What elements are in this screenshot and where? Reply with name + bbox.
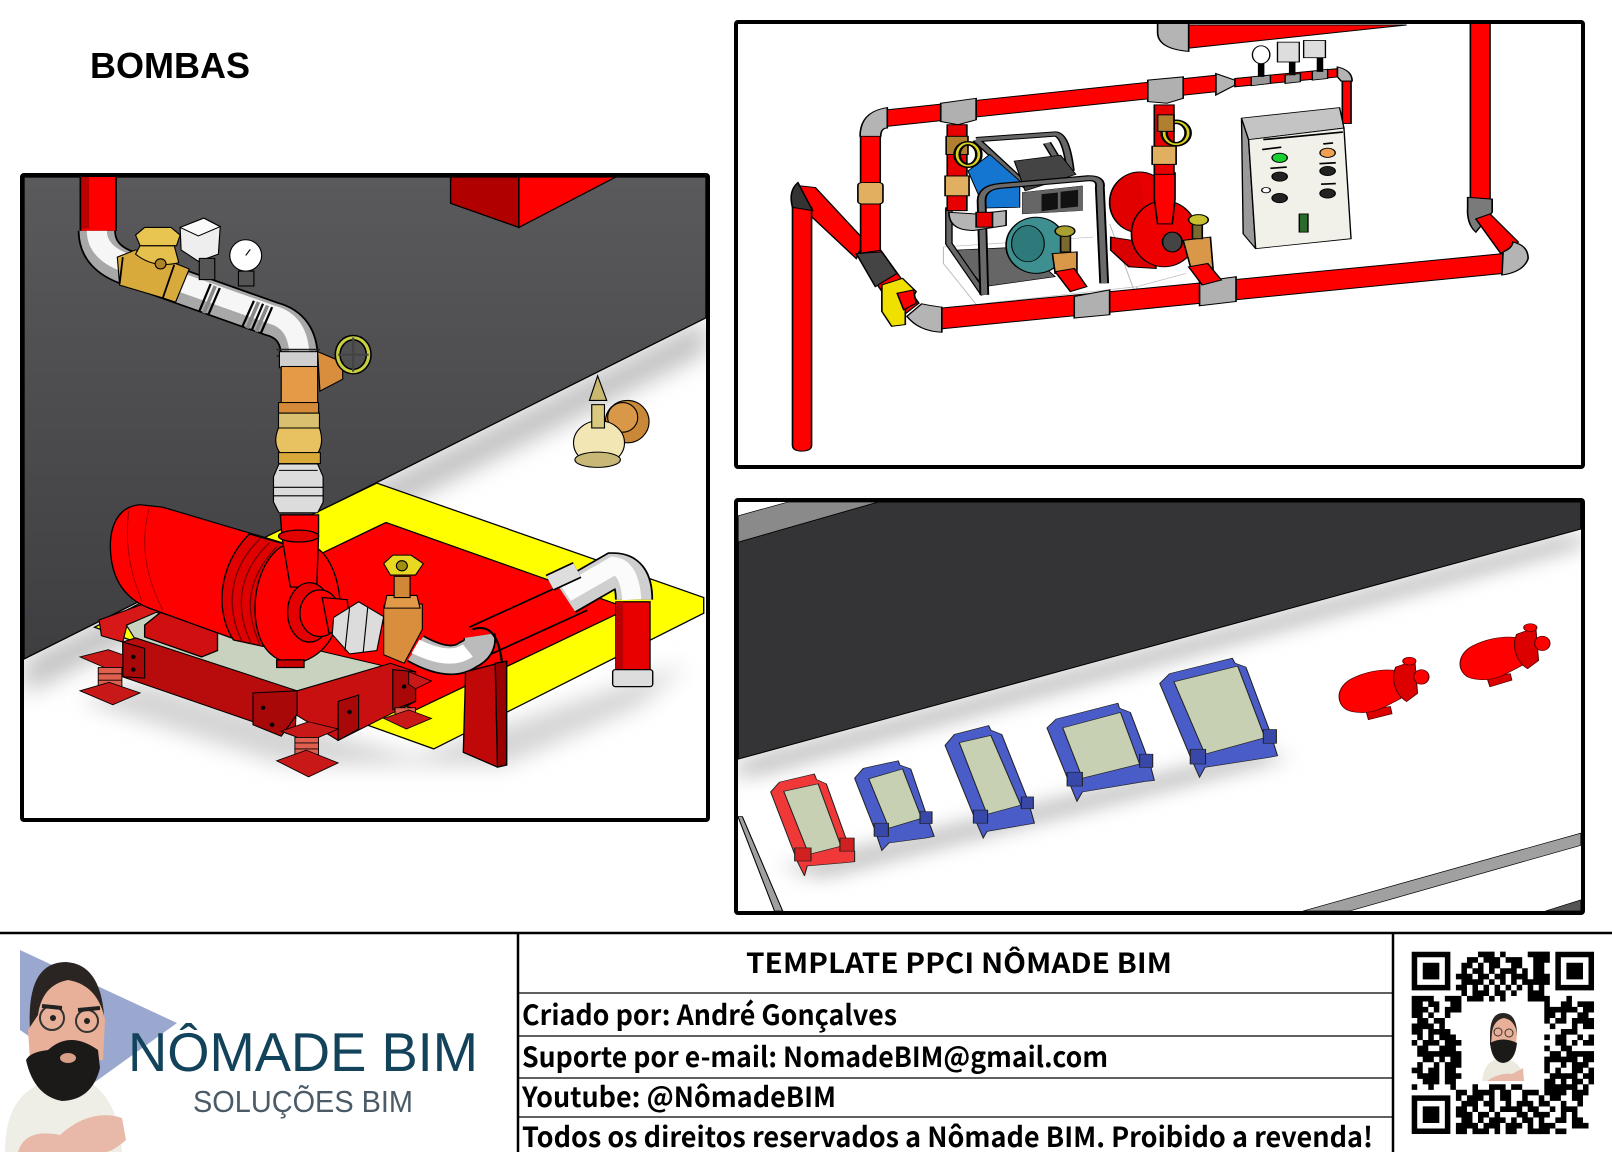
template info text: Criado por: André Gonçalves xyxy=(522,994,897,1034)
panel: pump models row xyxy=(734,498,1585,915)
title: BOMBAS xyxy=(90,45,250,86)
ghost bases xyxy=(943,224,1186,318)
template info text: TEMPLATE PPCI NÔMADE BIM xyxy=(746,942,1172,982)
template info text: Suporte por e-mail: NomadeBIM@gmail.com xyxy=(522,1036,1108,1076)
template info text: Youtube: @NômadeBIM xyxy=(521,1076,836,1116)
discharge valve xyxy=(332,555,423,663)
logo triangle xyxy=(20,950,177,1082)
upper pipes xyxy=(85,177,320,358)
pump base: blue 3 xyxy=(1047,703,1154,801)
pipe support and riser xyxy=(463,602,653,767)
avatar xyxy=(5,962,126,1152)
pump base: blue 4 xyxy=(1160,658,1277,777)
left drop pipe xyxy=(791,183,864,451)
pump base: blue 1 xyxy=(855,761,934,851)
spring mounts xyxy=(80,650,431,777)
red pump 2 xyxy=(1460,624,1550,687)
control panel xyxy=(1242,108,1351,249)
pump base: red xyxy=(771,774,855,876)
QR avatar xyxy=(1482,1013,1524,1081)
engine pump frame xyxy=(949,134,1104,295)
left branch valve xyxy=(945,125,1006,230)
footer table lines xyxy=(0,933,1612,1152)
main loop pipes xyxy=(856,67,1528,332)
discharge pipework xyxy=(416,566,634,660)
wall xyxy=(24,177,706,659)
check valve and gauges xyxy=(117,218,262,302)
red pump 1 xyxy=(1339,657,1429,720)
base shadow xyxy=(81,663,686,765)
outlet valves xyxy=(1052,215,1221,292)
pump base frame xyxy=(99,602,416,740)
red wall box xyxy=(451,177,616,227)
logo wordmark: SOLUÇÕES BIM xyxy=(193,1084,413,1119)
logo wordmark: NÔMADE BIM xyxy=(128,1021,478,1083)
gauges and switches xyxy=(1251,41,1328,86)
floor shadow xyxy=(24,318,706,695)
floor strips xyxy=(738,817,1581,911)
panel: pump detail view xyxy=(20,173,710,822)
pump base: blue 2 xyxy=(945,726,1034,838)
tees xyxy=(941,77,1236,318)
floor shadows xyxy=(738,529,1581,881)
spare valve on floor xyxy=(574,376,649,467)
vertical valve stack xyxy=(273,338,369,513)
electric pump xyxy=(1110,105,1197,268)
motor xyxy=(110,505,286,657)
QR code xyxy=(1412,952,1594,1134)
yellow floor plate xyxy=(95,483,704,749)
template info text xyxy=(521,942,1373,1152)
panel: pipe layout view xyxy=(734,20,1585,469)
top and right pipes xyxy=(1158,23,1518,254)
logo wordmark xyxy=(128,1021,478,1119)
dark wall xyxy=(738,502,1581,759)
volute xyxy=(255,515,350,668)
